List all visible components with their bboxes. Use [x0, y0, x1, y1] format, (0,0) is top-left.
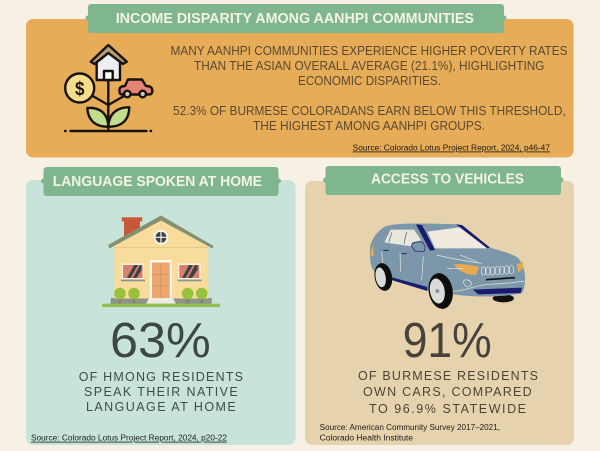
heading: vehicles	[323, 166, 564, 195]
panel background: language	[26, 180, 296, 445]
source: language: Source: Colorado Lotus Project Report, 2024, p20-22	[31, 434, 228, 443]
source: vehicles	[320, 423, 500, 443]
caption: Hmong residents: OF HMONG RESIDENTS	[79, 370, 243, 384]
panel background: income	[26, 19, 574, 158]
text block: poverty rates: ECONOMIC DISPARITIES.	[298, 74, 441, 88]
panel: language spoken at home	[26, 167, 296, 445]
text block: poverty rates	[170, 44, 568, 133]
heading: vehicles: ACCESS TO VEHICLES	[371, 172, 524, 188]
icon: car illustration	[370, 224, 525, 311]
source: vehicles: Source: American Community Survey 2017–2021,	[320, 423, 500, 432]
statistic: 91%: 91%	[403, 314, 492, 368]
heading: language	[41, 167, 281, 196]
heading: language: LANGUAGE SPOKEN AT HOME	[53, 174, 262, 190]
panel background: vehicles	[305, 181, 574, 445]
text block: poverty rates: THE HIGHEST AMONG AANHPI GROUPS.	[253, 119, 485, 133]
source: income: Source: Colorado Lotus Project Report, 2024, p46-47	[353, 144, 551, 152]
panel: access to vehicles	[305, 166, 574, 445]
caption: Burmese residents	[358, 369, 538, 416]
icon: house illustration	[102, 216, 220, 307]
caption: Burmese residents: OWN CARS, COMPARED	[363, 385, 532, 399]
icon: house, coin and car growing from a plant: $	[75, 79, 85, 100]
text block: poverty rates: 52.3% OF BURMESE COLORADANS EARN BELOW THIS THRESHOLD,	[173, 104, 566, 118]
heading: income disparity: INCOME DISPARITY AMONG AANHPI COMMUNITIES	[116, 11, 474, 27]
icon: house, coin and car growing from a plant	[65, 45, 152, 131]
caption: Hmong residents: SPEAK THEIR NATIVE	[84, 385, 238, 399]
panel: income disparity	[26, 4, 574, 158]
text block: poverty rates: THAN THE ASIAN OVERALL AVERAGE (21.1%), HIGHLIGHTING	[194, 59, 544, 73]
heading: income disparity	[86, 4, 506, 33]
text block: poverty rates: MANY AANHPI COMMUNITIES EXPERIENCE HIGHER POVERTY RATES	[170, 44, 568, 58]
caption: Burmese residents: OF BURMESE RESIDENTS	[358, 369, 538, 383]
source: vehicles: Colorado Health Institute	[320, 434, 414, 443]
statistic: 63%: 63%	[110, 314, 211, 368]
caption: Hmong residents	[79, 370, 243, 414]
caption: Hmong residents: LANGUAGE AT HOME	[86, 400, 236, 414]
caption: Burmese residents: TO 96.9% STATEWIDE	[369, 402, 526, 416]
